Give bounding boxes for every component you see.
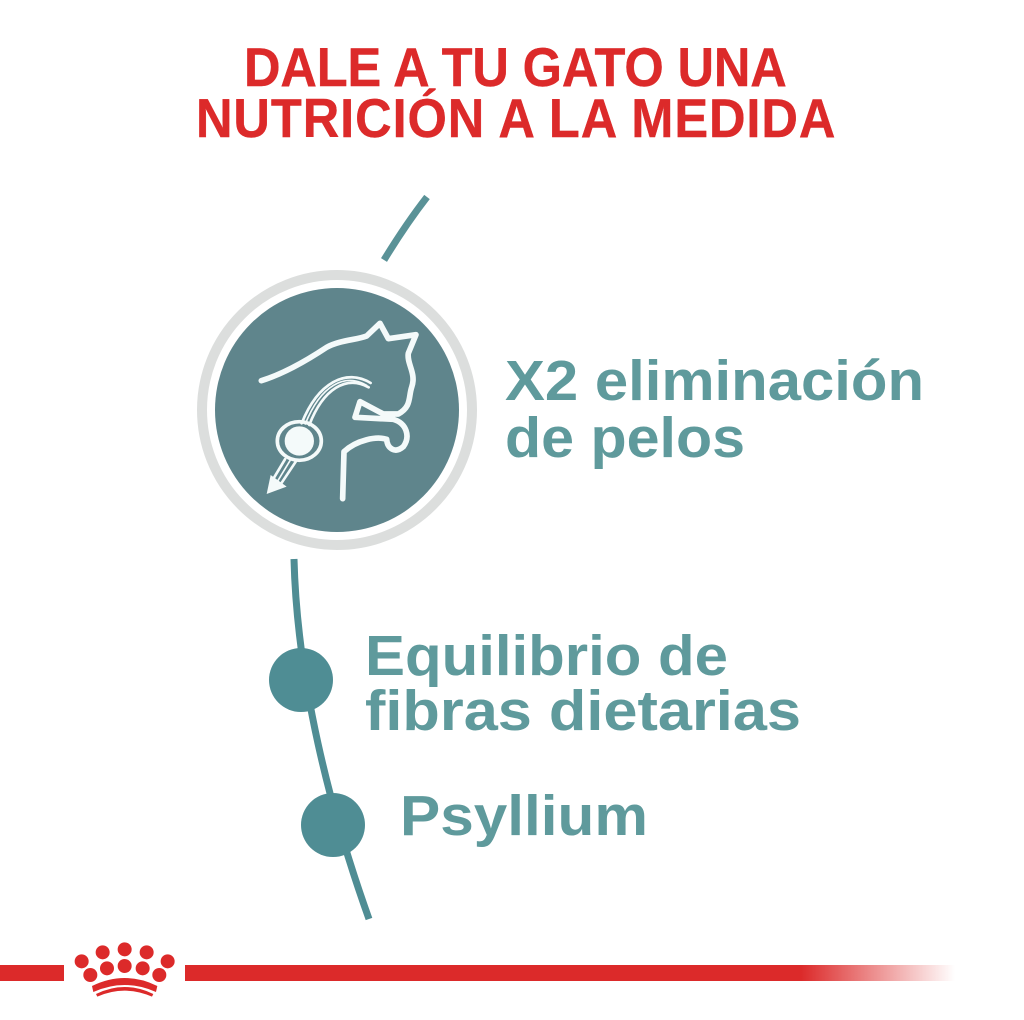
footer bar: left segment (0, 965, 64, 981)
hairball ring (277, 422, 321, 460)
connector line: top segment (384, 197, 427, 260)
benefit text: psyllium: Psyllium (400, 784, 648, 848)
connector line: lower curve (294, 559, 369, 919)
title line 1: DALE A TU GATO UNA (244, 37, 787, 98)
title line 2: NUTRICIÓN A LA MEDIDA (196, 87, 835, 149)
badge outer grey ring (202, 275, 472, 545)
benefit heading: hair elimination (505, 349, 924, 470)
benefit text: dietary fibre balance (365, 624, 801, 743)
text line 2: de pelos (505, 406, 745, 470)
footer bar: right fading segment (185, 965, 955, 981)
bullet dot: fibres (269, 648, 333, 712)
cat back, head and throat (261, 323, 416, 499)
text line 1: Equilibrio de (365, 624, 728, 688)
hairball (285, 426, 314, 456)
bullet dot: psyllium (301, 793, 365, 857)
crown lower band (96, 987, 153, 997)
text line 2: fibras dietarias (365, 679, 801, 743)
cat outline drawing (261, 323, 416, 499)
digestive tract centre line (277, 461, 290, 483)
arrowhead (267, 475, 287, 494)
crown band (92, 978, 157, 992)
digestive tract lines (273, 459, 296, 483)
icon: cat hairball elimination badge (202, 275, 472, 545)
icon: Royal Canin crown logo (75, 942, 175, 997)
text line 1: X2 eliminación (505, 349, 924, 413)
esophagus lines (302, 377, 371, 425)
esophagus centre line (305, 381, 367, 424)
badge teal disc (215, 288, 459, 532)
title (196, 37, 835, 149)
crown dots (75, 942, 175, 982)
